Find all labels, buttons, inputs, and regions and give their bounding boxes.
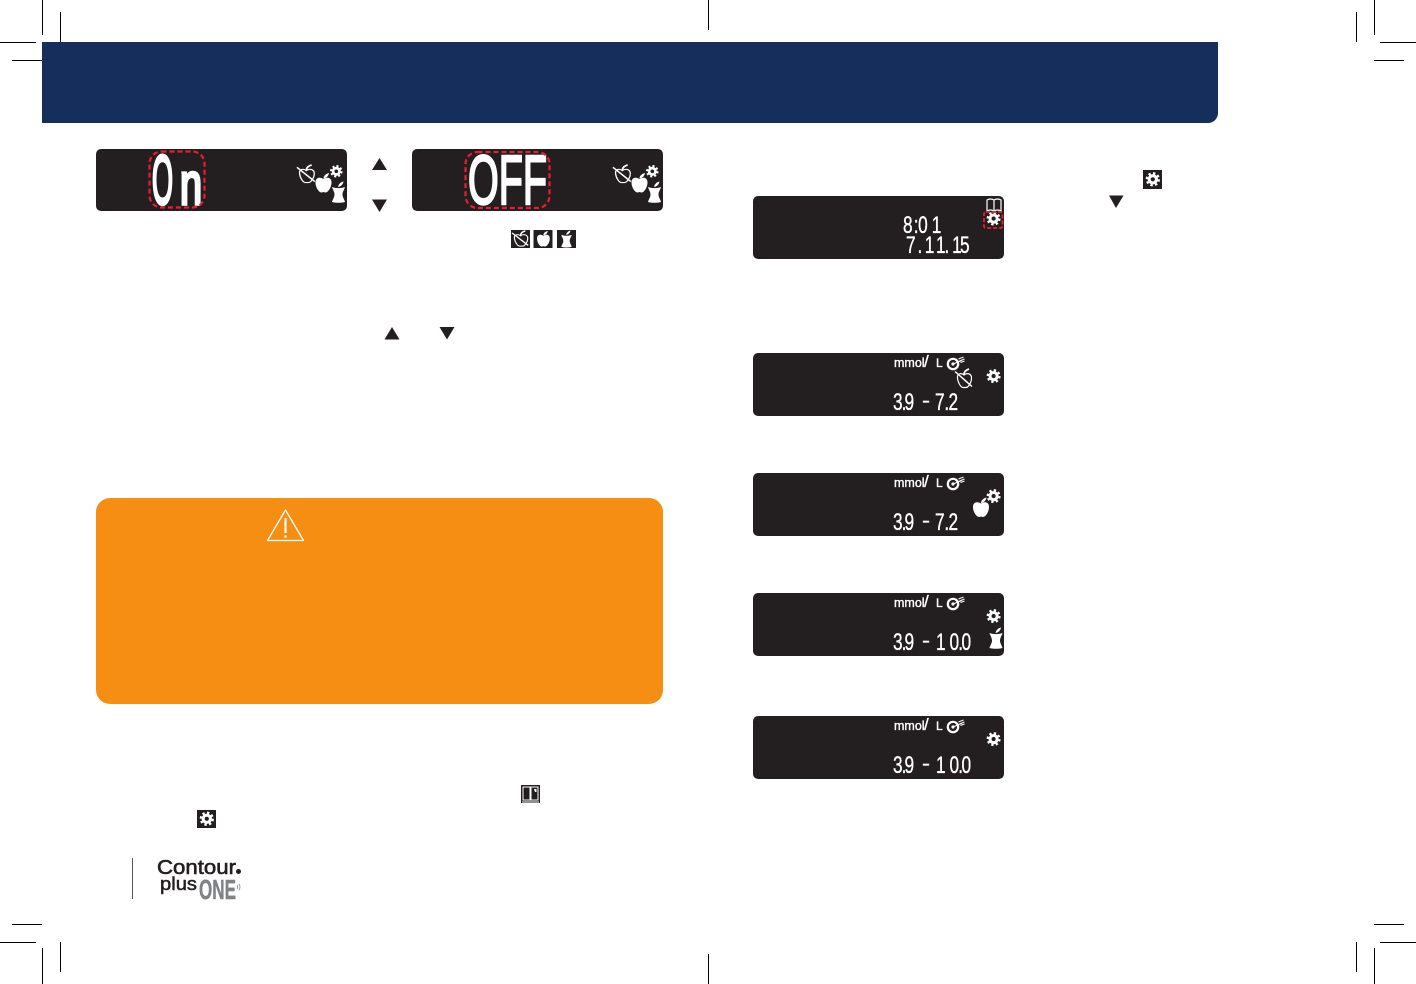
meter screen: fasting target 3.9 - 7.2: 7.2 [935, 389, 958, 416]
meter screen: fasting target 3.9 - 7.2 [753, 352, 1004, 416]
inline down arrow [1109, 196, 1124, 208]
meter screen: before meal target 3.9 - 7.2: 3.9 [893, 509, 914, 536]
meter screen: after meal target 3.9 - 10.0: / [924, 592, 929, 611]
inline icon: settings gear [197, 810, 216, 828]
meter screen: home with settings highlighted [753, 196, 1004, 259]
meter screen: fasting target 3.9 - 7.2: mmol [894, 356, 925, 370]
inline icon: book [521, 785, 540, 803]
footer divider [132, 858, 134, 899]
meter screen: before meal target 3.9 - 7.2: mmol [894, 476, 925, 490]
meter screen: after meal target 3.9 - 10.0: L [936, 596, 943, 610]
meter screen: home with settings highlighted: 8:01 [903, 212, 941, 239]
logo: Contour plus ONE: Contour [157, 857, 236, 879]
meter screen: before meal target 3.9 - 7.2: 7.2 [935, 509, 958, 536]
logo: Contour plus ONE: plus [160, 874, 197, 894]
inline up arrow [384, 327, 400, 340]
meter screen: after meal target 3.9 - 10.0: mmol [894, 596, 925, 610]
meter screen: fasting target 3.9 - 7.2: L [936, 356, 943, 370]
inline icon: settings gear [1143, 170, 1162, 189]
warning panel [96, 498, 663, 704]
meter screen: overall target 3.9 - 10.0: mmol [894, 719, 925, 733]
meter screen: OFF [412, 141, 663, 219]
meter screen: OFF: OFF [468, 141, 547, 219]
meter screen: overall target 3.9 - 10.0: L [936, 719, 943, 733]
meter screen: after meal target 3.9 - 10.0 [753, 592, 1004, 656]
up arrow button [372, 158, 387, 170]
meter screen: before meal target 3.9 - 7.2: / [924, 472, 929, 491]
down arrow button [372, 200, 387, 212]
meter screen: On [96, 141, 347, 219]
meter screen: On: O [152, 141, 173, 219]
meter screen: On: n [180, 152, 202, 217]
inline down arrow [440, 327, 454, 340]
meter screen: after meal target 3.9 - 10.0: 3.9 [893, 629, 914, 656]
header banner [42, 42, 1218, 123]
meter screen: overall target 3.9 - 10.0: 3.9 [893, 752, 914, 779]
logo: Contour plus ONE: ONE [199, 874, 236, 905]
meter screen: overall target 3.9 - 10.0: 10.0 [936, 752, 971, 779]
meter screen: overall target 3.9 - 10.0: / [924, 715, 929, 734]
meter screen: before meal target 3.9 - 7.2: L [936, 476, 943, 490]
logo: Contour plus ONE [157, 857, 241, 905]
meter screen: home with settings highlighted: 7.11.15 [906, 232, 970, 259]
meter screen: before meal target 3.9 - 7.2 [753, 472, 1004, 536]
meter screen: fasting target 3.9 - 7.2: 3.9 [893, 389, 914, 416]
meter screen: after meal target 3.9 - 10.0: - [922, 630, 930, 652]
meter screen: before meal target 3.9 - 7.2: - [922, 510, 930, 532]
meter screen: fasting target 3.9 - 7.2: / [924, 352, 929, 371]
meter screen: fasting target 3.9 - 7.2: - [922, 390, 930, 412]
meter screen: after meal target 3.9 - 10.0: 10.0 [936, 629, 971, 656]
inline icons: meal markers [511, 230, 576, 248]
icon: warning triangle [268, 510, 304, 540]
meter screen: overall target 3.9 - 10.0: - [922, 753, 930, 775]
meter screen: overall target 3.9 - 10.0 [753, 715, 1004, 779]
